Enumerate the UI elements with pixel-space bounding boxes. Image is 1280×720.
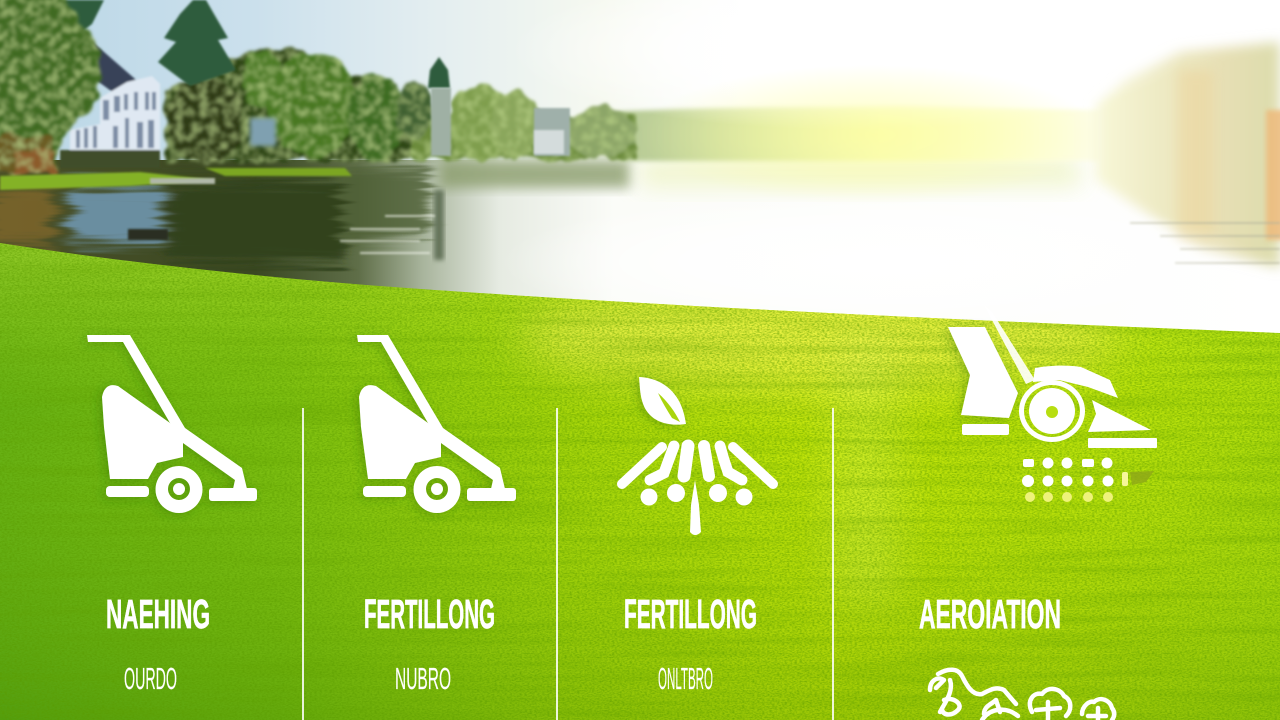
- pine trees: [50, 0, 450, 88]
- left foreground tree: [0, 0, 100, 174]
- heading: column 1: NAEHING: [106, 591, 210, 637]
- text: OURDO: [124, 661, 177, 696]
- icon: shrubs and clover row: [930, 670, 1114, 720]
- icon: fertilizer leaf and granules: [622, 377, 773, 535]
- icon: lawn mower 1: [87, 335, 257, 513]
- background: far tree line: [615, 42, 1280, 268]
- leaf: [639, 377, 686, 425]
- text: ONLTBRO: [658, 661, 713, 696]
- shore grass: [0, 172, 215, 190]
- lake water: [0, 160, 1280, 335]
- background: sky: [0, 0, 1280, 200]
- heading: column 2: FERTILLONG: [364, 591, 495, 637]
- caption: column 2: NUBRO: [395, 661, 451, 696]
- lawn: [0, 240, 1280, 720]
- house: [60, 38, 160, 168]
- aeration dots: [1022, 458, 1128, 502]
- column dividers: [302, 408, 834, 720]
- icon: lawn mower 2: [357, 335, 516, 513]
- faded trees: [400, 84, 636, 160]
- heading: column 3: FERTILLONG: [624, 591, 757, 637]
- icon: aeration machine: [948, 305, 1157, 502]
- sun glare: [500, 0, 1260, 332]
- heading: column 4: AEROIATION: [919, 591, 1061, 637]
- house and trees on far shore: [0, 0, 636, 190]
- main tree mass: [165, 48, 433, 164]
